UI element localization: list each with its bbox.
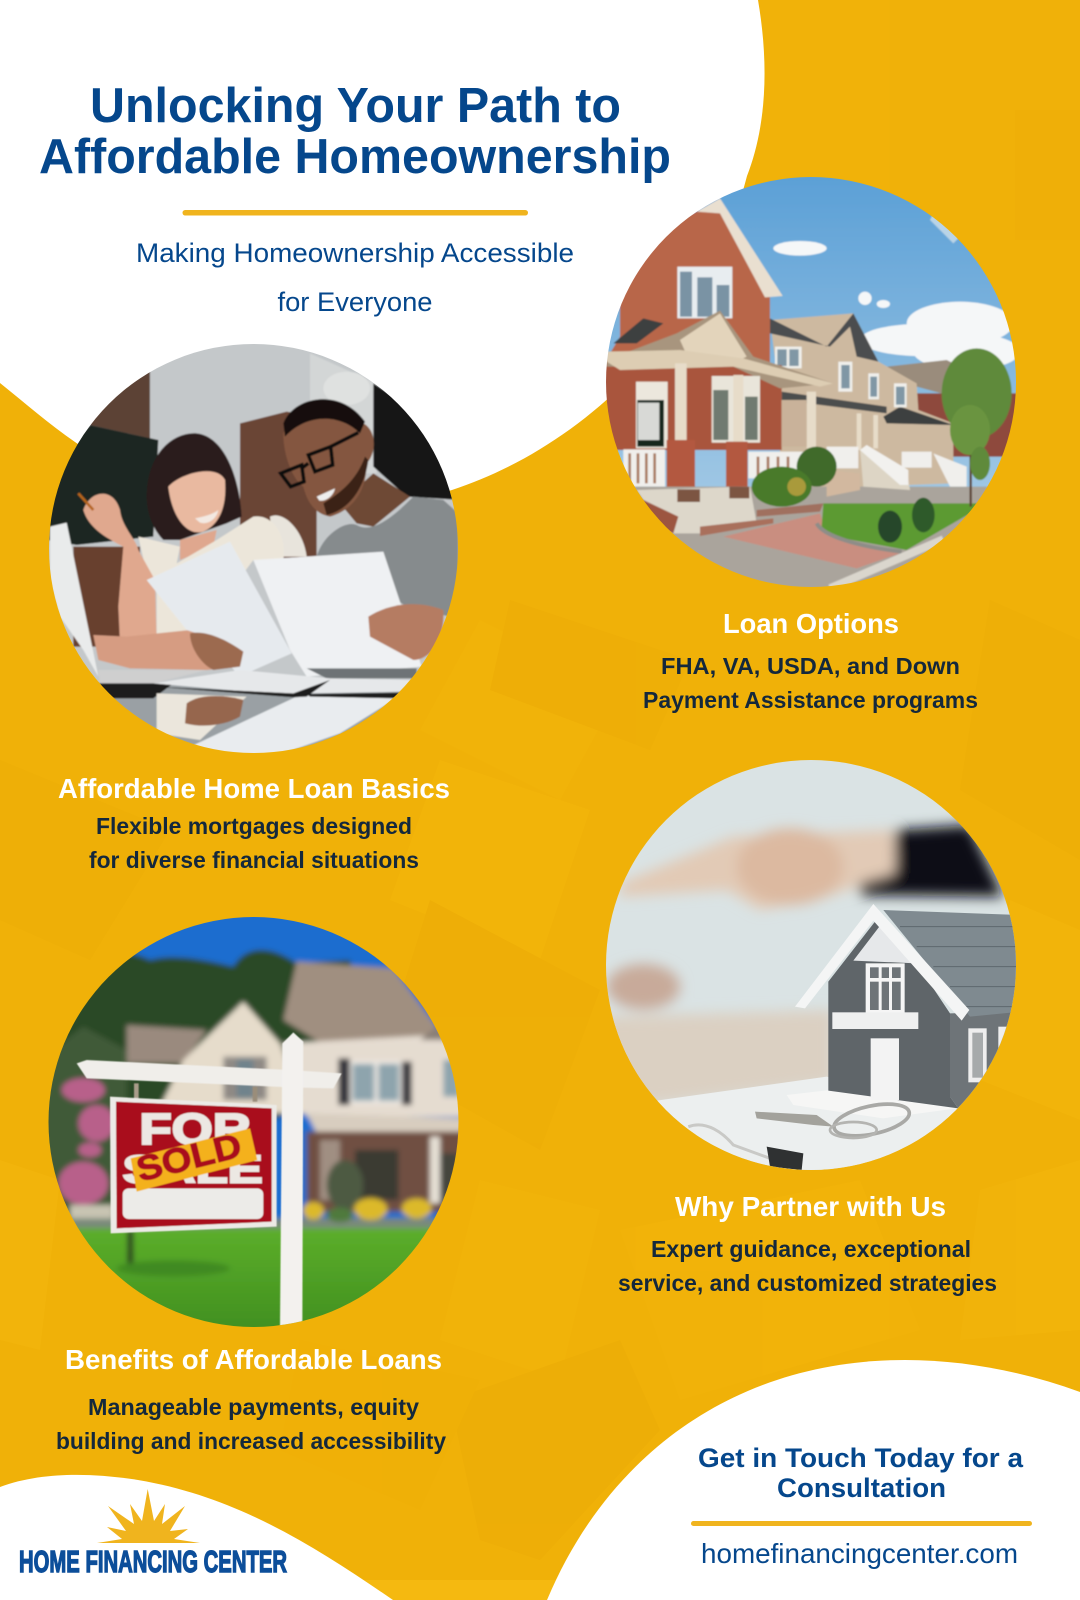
photo: brick townhouses <box>600 170 1030 590</box>
section: Why Partner with Us: Expert guidance, exceptional <box>651 1236 971 1262</box>
white blob: contact panel <box>547 1360 1080 1600</box>
call to action heading <box>698 1443 1023 1503</box>
section: Why Partner with Us: Why Partner with Us <box>675 1191 946 1222</box>
section: Affordable Home Loan Basics: Affordable Home Loan Basics <box>58 773 450 804</box>
section: Loan Options: Loan Options <box>723 608 899 639</box>
contact divider <box>691 1521 1032 1526</box>
icon: sun rays <box>97 1489 200 1543</box>
section: Benefits of Affordable Loans: Manageable payments, equity <box>88 1394 419 1420</box>
white blob: top header panel <box>0 0 765 510</box>
call to action heading: Get in Touch Today for a <box>698 1443 1023 1473</box>
section: Benefits of Affordable Loans: building and increased accessibility <box>56 1428 446 1454</box>
title: Affordable Homeownership <box>39 130 671 184</box>
website address: homefinancingcenter.com <box>701 1538 1018 1569</box>
photo: sold sign in front of house <box>40 910 470 1342</box>
section: Affordable Home Loan Basics: for diverse financial situations <box>89 847 419 873</box>
section: Loan Options: Payment Assistance programs <box>643 687 978 713</box>
call to action heading: Consultation <box>777 1473 946 1503</box>
photo: couple reviewing paperwork <box>40 340 470 760</box>
subtitle: for Everyone <box>278 287 432 317</box>
title: Unlocking Your Path to <box>90 79 621 133</box>
photo: sold sign in front of house: SALE <box>123 1148 263 1192</box>
section: Why Partner with Us <box>618 1191 997 1296</box>
photo: sold sign in front of house: SOLD <box>133 1127 245 1189</box>
section: Benefits of Affordable Loans: Benefits of Affordable Loans <box>65 1344 442 1375</box>
section: Affordable Home Loan Basics <box>58 773 450 873</box>
logo: Home Financing Center: HOME FINANCING CENTER <box>19 1544 287 1579</box>
photo: model house and handshake <box>606 760 1016 1170</box>
section: Benefits of Affordable Loans <box>56 1344 446 1454</box>
section: Loan Options: FHA, VA, USDA, and Down <box>661 653 960 679</box>
section: Loan Options <box>643 608 978 713</box>
section: Affordable Home Loan Basics: Flexible mortgages designed <box>96 813 412 839</box>
subtitle: Making Homeownership Accessible <box>136 238 574 268</box>
logo: Home Financing Center <box>19 1489 287 1579</box>
title <box>39 79 671 184</box>
photo: sold sign in front of house: FOR <box>139 1105 251 1154</box>
white blob: logo panel <box>0 1475 393 1600</box>
section: Why Partner with Us: service, and customized strategies <box>618 1270 997 1296</box>
subtitle <box>136 238 574 317</box>
header divider <box>182 210 528 216</box>
